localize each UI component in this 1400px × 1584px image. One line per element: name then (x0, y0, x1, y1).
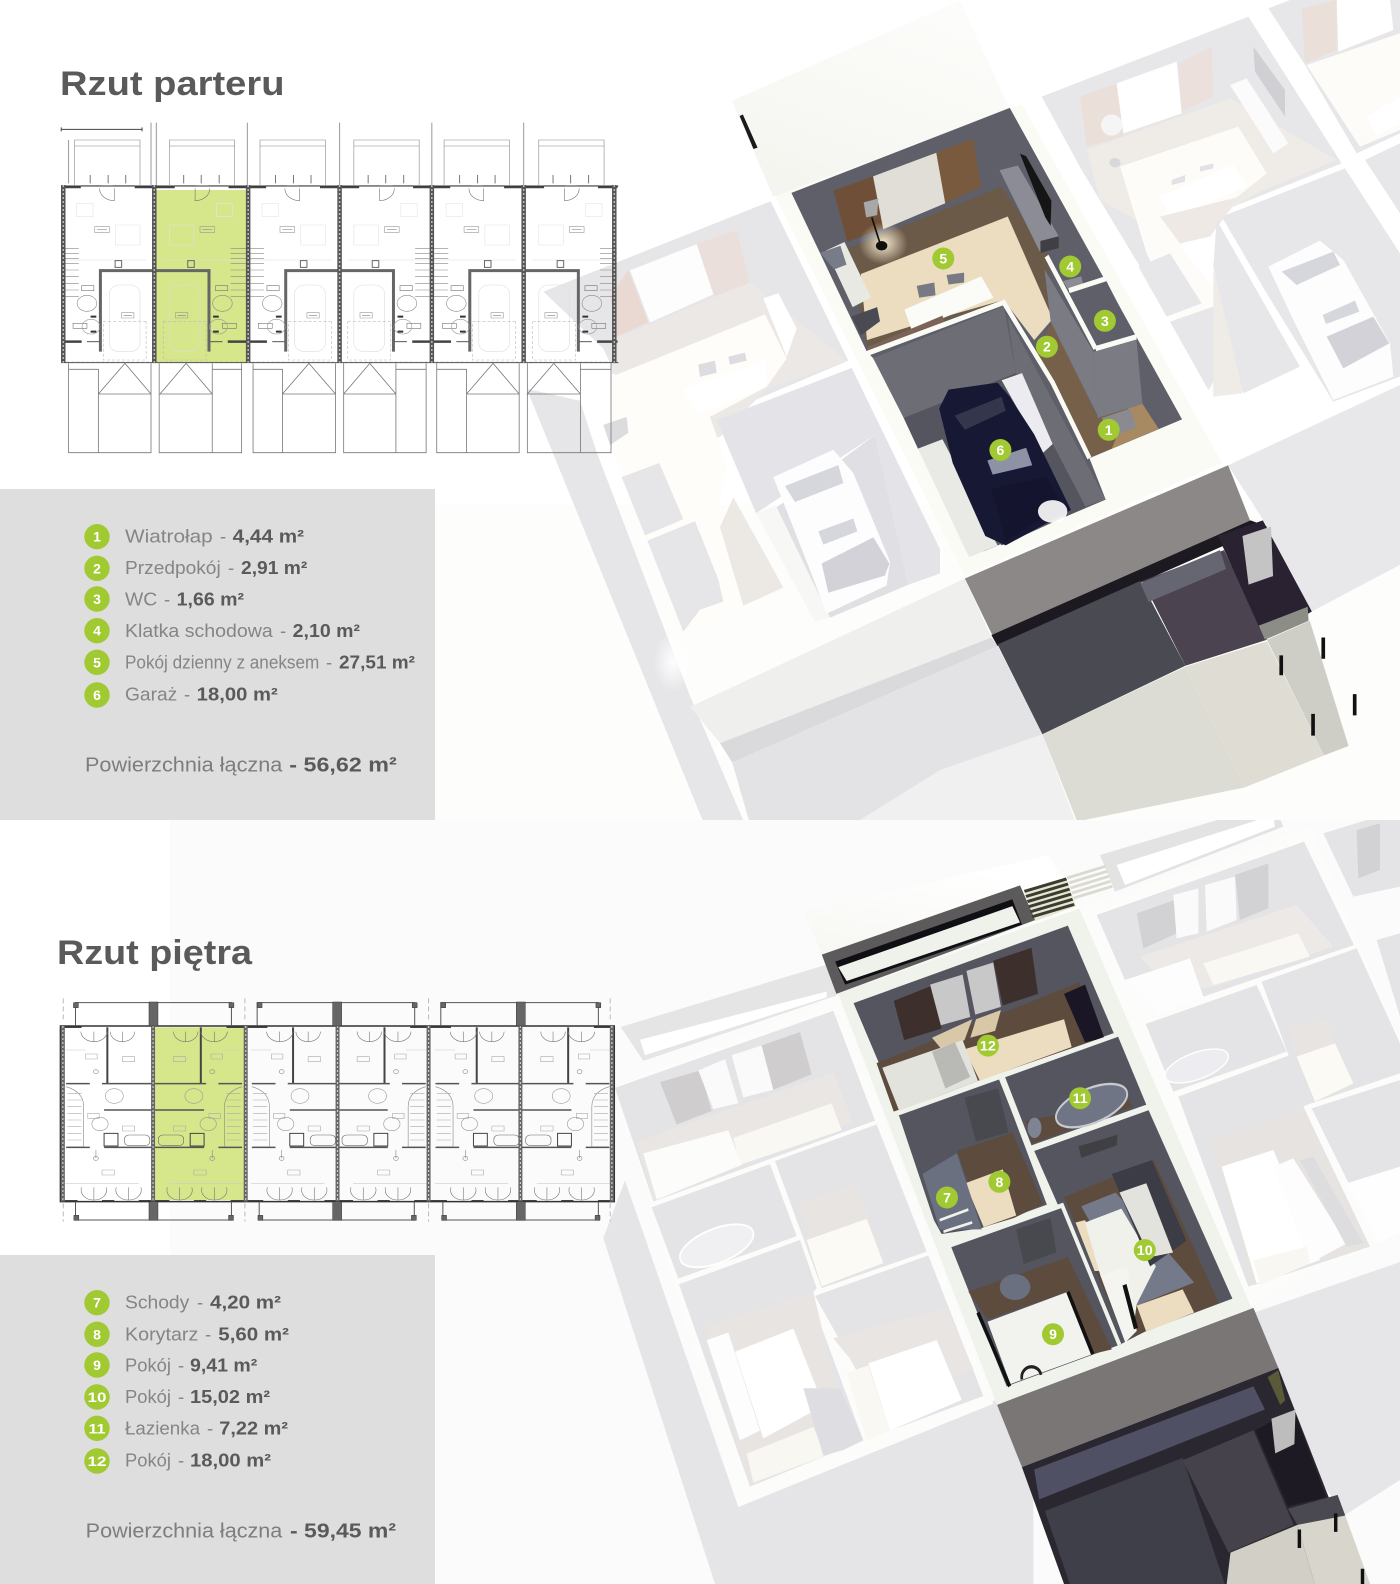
highlighted unit (154, 1027, 246, 1200)
ghost unit: right neighbour, ground floor (1042, 0, 1400, 402)
ghost unit: right neighbour, first floor (1067, 803, 1400, 1307)
number markers, ground floor: 6 (997, 442, 1005, 458)
ghost street band, right of first floor (1253, 1262, 1400, 1515)
rooms 7 and 8 (899, 1079, 1049, 1234)
floor plan: first floor (60, 998, 614, 1222)
room 10 (1034, 1109, 1232, 1345)
number markers, ground floor: 3 (1101, 313, 1109, 329)
total area: Powierzchnia łączna (86, 1521, 283, 1543)
floor plan: ground floor (61, 123, 618, 453)
row 4 (84, 618, 360, 643)
row 3: - (164, 588, 170, 609)
row 9 (84, 1352, 257, 1378)
ghost unit: left neighbour, ground floor (527, 201, 940, 820)
ghost street band (690, 385, 1400, 826)
section 1 background (435, 505, 1400, 820)
room 11 (1005, 1035, 1146, 1145)
total area: - 59,45 m² (290, 1521, 396, 1543)
row 5: 27,51 m² (339, 652, 415, 672)
number markers, ground floor: 5 (939, 250, 947, 266)
number markers, first floor: 7 (943, 1190, 951, 1206)
living room (791, 108, 1182, 552)
row 8: 8 (93, 1326, 101, 1342)
number markers, first floor (936, 1035, 1156, 1345)
row 7 (84, 1290, 281, 1315)
row 9: - (178, 1355, 184, 1376)
total area: - 56,62 m² (289, 755, 397, 777)
row 2: 2,91 m² (241, 558, 307, 578)
row 9: 9,41 m² (190, 1356, 257, 1376)
row 8: - (205, 1323, 211, 1344)
row 3: 1,66 m² (177, 589, 244, 609)
row 8 (84, 1322, 289, 1347)
main unit: first floor (804, 855, 1370, 1584)
total area (85, 755, 397, 777)
row 9: 9 (93, 1357, 101, 1373)
row 1: Wiatrołap (125, 525, 213, 546)
row 1: 4,44 m² (233, 526, 304, 546)
row 1: - (220, 525, 226, 546)
row 3: WC (125, 588, 157, 609)
panel: first floor areas (0, 1255, 435, 1584)
ground floor 3D view (527, 0, 1400, 826)
unit walls (838, 908, 1252, 1405)
row 2: - (228, 557, 234, 578)
outer walls (776, 104, 1222, 505)
row 11: Łazienka (125, 1418, 201, 1439)
panel: ground floor areas (0, 489, 435, 820)
row 5 (84, 650, 415, 675)
number markers, ground floor (932, 248, 1120, 461)
row 2 (84, 556, 307, 581)
row 8: Korytarz (125, 1323, 198, 1344)
row 1: 1 (93, 529, 101, 545)
row 10 (84, 1384, 270, 1410)
row 11: - (207, 1418, 213, 1439)
street strip (997, 1308, 1278, 1467)
roof strip (732, 50, 1008, 196)
row 6 (84, 682, 278, 708)
number markers, first floor: 12 (980, 1038, 996, 1054)
row 7: - (197, 1292, 203, 1313)
number markers, ground floor: 2 (1043, 339, 1051, 355)
row 7: 4,20 m² (210, 1293, 281, 1313)
inner walls (899, 1035, 1148, 1345)
row 10: 10 (88, 1389, 107, 1405)
row 10: 15,02 m² (190, 1387, 270, 1407)
row 11: 7,22 m² (219, 1419, 288, 1439)
row 12 (84, 1448, 271, 1474)
garage (873, 306, 1106, 557)
row 6: 18,00 m² (197, 684, 278, 704)
row 6: Garaż (125, 684, 177, 704)
row 4: 4 (93, 623, 101, 639)
row 5: Pokój dzienny z aneksem (125, 652, 319, 672)
row 7: 7 (93, 1295, 101, 1311)
row 4: - (280, 620, 286, 641)
row 3: 3 (93, 591, 101, 607)
paved driveway (998, 520, 1355, 822)
total area: Powierzchnia łączna (85, 755, 283, 777)
row 2: 2 (93, 560, 101, 576)
main unit: ground floor (690, 0, 1400, 826)
number markers, first floor: 10 (1137, 1242, 1153, 1258)
row 5: 5 (93, 654, 101, 670)
number markers, first floor: 8 (996, 1174, 1004, 1190)
room 9 (951, 1206, 1120, 1386)
dark driveway (1022, 1368, 1370, 1584)
row 10: Pokój (125, 1386, 171, 1407)
row 12: 18,00 m² (190, 1450, 271, 1470)
number markers, first floor: 11 (1073, 1090, 1088, 1106)
row 6: - (184, 684, 190, 704)
inner walls (865, 256, 1136, 458)
driveways (69, 363, 611, 453)
row 10: - (178, 1386, 184, 1407)
row 12: 12 (88, 1453, 107, 1469)
row 12: Pokój (125, 1450, 171, 1470)
street strip (965, 465, 1251, 637)
hall and small rooms (1034, 269, 1159, 458)
room 12 (854, 926, 1114, 1112)
first floor 3D view (603, 803, 1400, 1584)
row 11: 11 (88, 1420, 106, 1436)
highlighted unit (155, 190, 248, 363)
row 4: Klatka schodowa (125, 620, 273, 641)
number markers, ground floor: 4 (1066, 258, 1074, 274)
ghost unit: left neighbour, first floor (603, 965, 1033, 1584)
row 8: 5,60 m² (218, 1324, 289, 1344)
row 12: - (178, 1450, 184, 1470)
row 9: Pokój (125, 1355, 171, 1376)
number markers, first floor: 9 (1049, 1326, 1057, 1342)
heading: first floor: Rzut piętra (57, 934, 253, 972)
section 2 background (170, 820, 1400, 1584)
number markers, ground floor: 1 (1105, 422, 1113, 438)
row 4: 2,10 m² (293, 621, 360, 641)
row 1 (84, 524, 304, 549)
heading: ground floor: Rzut parteru (60, 65, 284, 103)
row 7: Schody (125, 1292, 190, 1313)
terrace top (822, 878, 1076, 994)
total area (86, 1521, 396, 1543)
row 3 (84, 586, 244, 612)
balconies (63, 998, 610, 1222)
row 11 (84, 1416, 288, 1441)
row 2: Przedpokój (125, 557, 221, 578)
row 6: 6 (93, 687, 101, 703)
row 5: - (326, 652, 332, 672)
